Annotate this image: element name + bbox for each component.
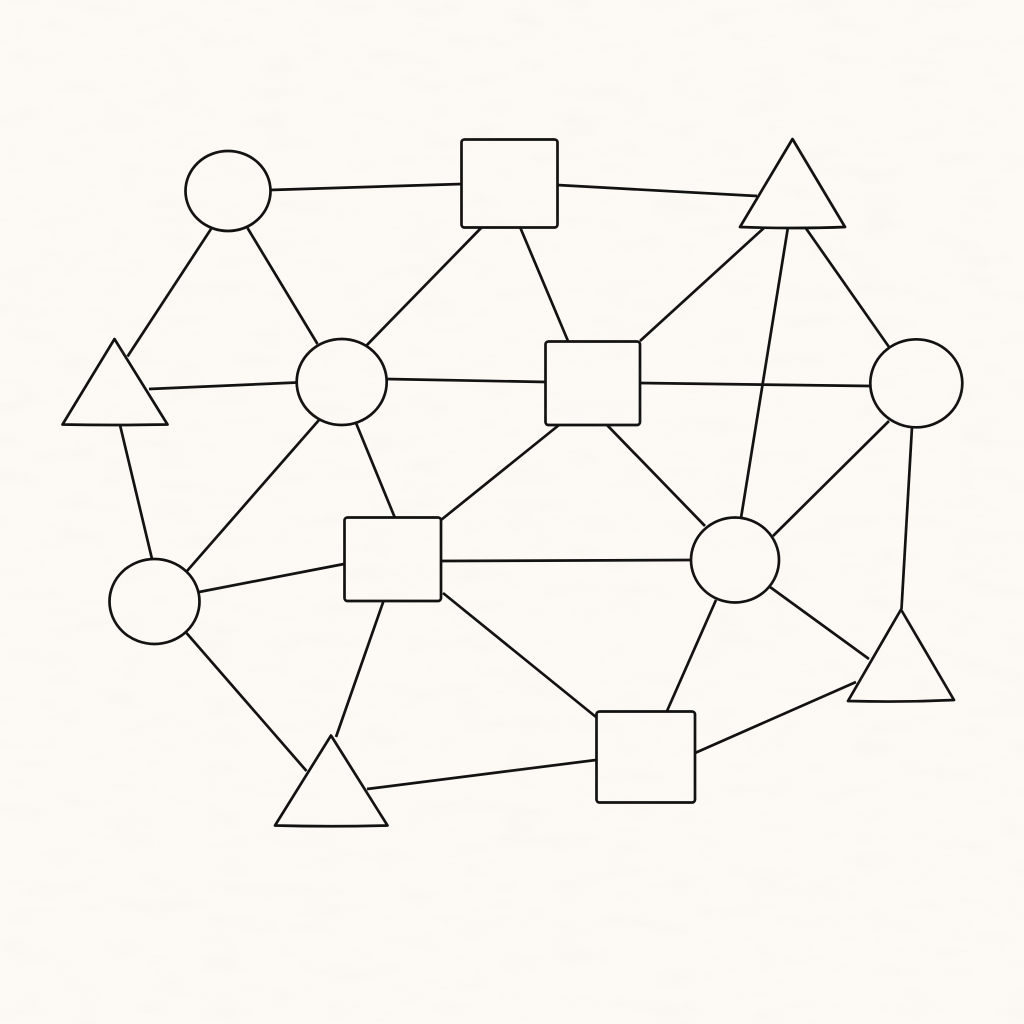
- triangle nodes: [62, 139, 954, 826]
- square nodes: [344, 140, 695, 802]
- connecting lines: [120, 184, 912, 789]
- circle nodes: [110, 151, 962, 644]
